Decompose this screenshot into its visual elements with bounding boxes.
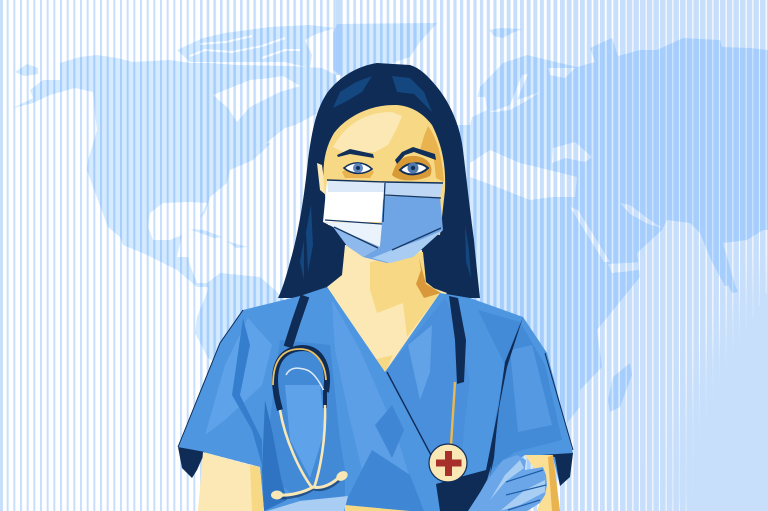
greenland: [333, 23, 437, 82]
eyebrows: [337, 147, 436, 164]
neck and chest: [327, 245, 447, 373]
hair: [278, 63, 480, 298]
map water cutouts: [190, 36, 662, 273]
caribbean islands: [190, 229, 248, 248]
right stethoscope tube: [449, 296, 466, 445]
alaska island: [15, 64, 38, 76]
madagascar: [608, 363, 632, 412]
eurasia and africa: [440, 38, 768, 500]
face: [323, 105, 445, 235]
ear: [317, 163, 326, 195]
right arm: [525, 455, 560, 511]
north america: [13, 55, 345, 287]
nurse figure: [178, 63, 573, 511]
left glove: [267, 496, 348, 511]
forearm strip: [345, 505, 410, 511]
left arm: [198, 452, 264, 511]
left stethoscope: [271, 296, 349, 500]
arctic islands: [177, 25, 335, 68]
right glove: [468, 455, 547, 511]
sri lanka: [729, 279, 738, 293]
south america: [195, 273, 290, 400]
scrubs torso and sleeves: [178, 287, 573, 511]
eyes: [344, 162, 428, 174]
stethoscope disc with red cross: [429, 444, 467, 482]
iceland: [489, 28, 522, 38]
face mask: [323, 180, 443, 263]
